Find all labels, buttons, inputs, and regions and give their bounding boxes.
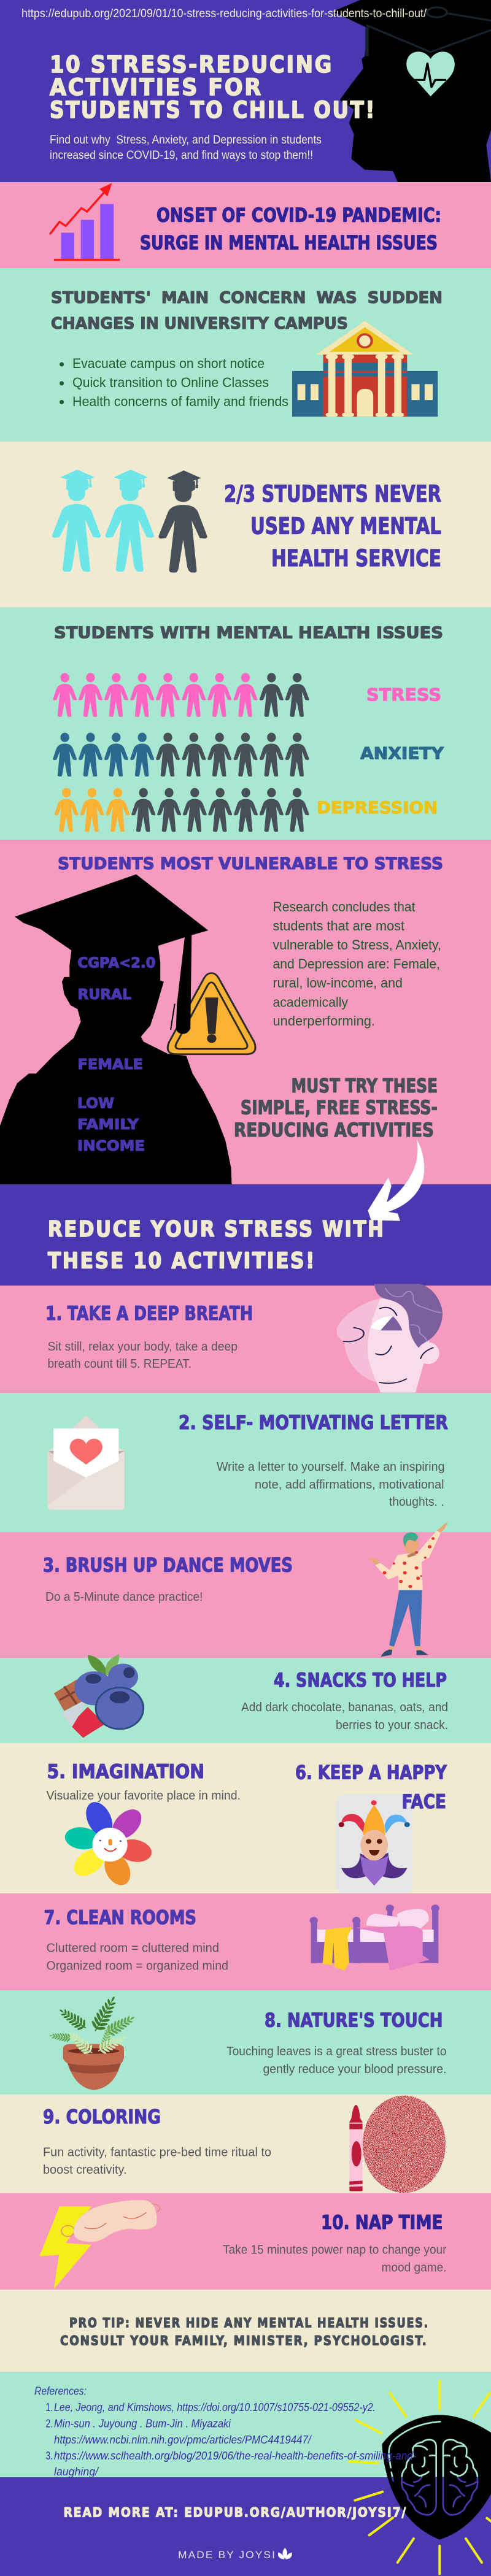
heading: imagination: 5. IMAGINATION [47,1761,204,1783]
risk labels: RURAL [77,987,131,1003]
description: Take 15 minutes power nap to change your [223,2244,447,2257]
panel: pro tip [0,2290,491,2372]
heading [140,205,441,254]
references: https://www.ncbi.nlm.nih.gov/pmc/articles/PMC4419447/ [54,2434,312,2446]
icon: messy bed [310,1904,439,1971]
research paragraph: vulnerable to Stress, Anxiety, [273,937,441,953]
icon: envelope with heart [48,1416,125,1510]
panel: activity 3 dance moves [0,1522,491,1658]
research paragraph: underperforming. [273,1013,375,1029]
description: breath count till 5. REPEAT. [48,1357,191,1371]
title: STUDENTS TO CHILL OUT! [50,97,376,123]
panel: references background [0,2372,491,2477]
risk labels: INCOME [77,1138,145,1154]
icon: brain shield with rays [349,2381,491,2574]
research paragraph: Research concludes that [273,899,415,914]
icon: student head silhouette with mental health heart [333,0,491,182]
heading: REDUCE YOUR STRESS WITH [48,1217,385,1242]
label: depression: DEPRESSION [317,799,438,818]
panel: activity 7 clean rooms [0,1893,491,1991]
icon: jester face [336,1795,412,1893]
description: Organized room = organized mind [47,1959,228,1972]
bullet list: Evacuate campus on short notice [72,356,265,371]
icon: university building [292,321,438,416]
pictogram: depression row [55,788,309,832]
references: 1. [45,2401,53,2413]
description: Fun activity, fantastic pre-bed time ritual to [43,2145,271,2159]
panel: activity 8 nature's touch [0,1990,491,2095]
source url: https://edupub.org/2021/09/01/10-stress-reducing-activities-for-students-to-chill-out/ [21,7,427,20]
heading: STUDENTS WITH MENTAL HEALTH ISSUES [54,624,443,643]
bullet list: Quick transition to Online Classes [72,375,269,390]
heading [48,1217,385,1273]
heading: 4. SNACKS TO HELP [274,1669,447,1692]
title: 10 STRESS-REDUCING [50,52,333,78]
heading: STUDENTS' MAIN CONCERN WAS SUDDEN [51,289,443,307]
research paragraph [273,899,441,1029]
icon: rising bar chart with arrow [50,183,120,261]
risk labels: FAMILY [77,1117,139,1133]
description [48,1340,238,1371]
heading: 2. SELF- MOTIVATING LETTER [179,1412,448,1434]
icon: lotus logo [278,2548,292,2559]
heading: THESE 10 ACTIVITIES! [48,1249,316,1273]
panel: main concern [0,268,491,442]
icon: three graduates [52,470,207,572]
pictogram: anxiety row [53,733,309,776]
label: stress: STRESS [366,684,441,705]
panel: activity 1 deep breath [0,1284,491,1393]
description [241,1701,448,1732]
panel: activity 4 snacks [0,1654,491,1743]
description: Do a 5-Minute dance practice! [45,1590,203,1604]
references: Lee, Jeong, and Kimshows, https://doi.org/10.1007/s10755-021-09552-y2. [54,2401,376,2413]
heading [51,289,443,333]
panel: 2/3 students [0,442,491,607]
research paragraph: students that are most [273,918,404,933]
description [43,2145,271,2177]
credit: MADE BY JOYSI [178,2549,276,2561]
description [226,2045,447,2076]
heading: 8. NATURE'S TOUCH [265,2009,443,2031]
research paragraph: academically [273,995,348,1010]
pictogram: stress row [53,673,309,717]
heading: happy face: FACE [401,1791,446,1813]
icon: graduate silhouette with warning sign [0,874,255,1184]
references: References: [34,2385,87,2397]
icon: smiling flower [63,1799,155,1888]
description: Sit still, relax your body, take a deep [48,1340,238,1354]
description: Add dark chocolate, bananas, oats, and [241,1701,448,1714]
heading: 3. BRUSH UP DANCE MOVES [43,1554,293,1576]
references: 3. [45,2450,53,2462]
bullet list [60,356,288,409]
panel: reduce your stress banner [0,1184,491,1286]
icon: crayon and red scribble [349,2096,446,2193]
panel: activity 10 nap time [0,2193,491,2290]
call to action [234,1075,438,1141]
icon: relaxed face [337,1284,443,1393]
tip text: PRO TIP: NEVER HIDE ANY MENTAL HEALTH ISSUES. [69,2316,429,2331]
description: Write a letter to yourself. Make an inspiring [217,1460,444,1474]
heading: 1. TAKE A DEEP BREATH [45,1303,253,1325]
panel: onset of pandemic [0,182,491,269]
description: imagination: Visualize your favorite place in mind. [47,1789,241,1803]
panel: activity 2 self-motivating letter [0,1393,491,1532]
panel: footer background [0,2477,491,2576]
tip text: CONSULT YOUR FAMILY, MINISTER, PSYCHOLOGIST. [60,2333,427,2348]
risk labels: FEMALE [77,1057,143,1073]
subtitle: Find out why Stress, Anxiety, and Depression in students [50,134,322,147]
description: berries to your snack. [336,1719,448,1732]
panel: activities 5 and 6 [0,1743,491,1893]
icon: potted fern [49,1993,137,2090]
call to action: REDUCING ACTIVITIES [234,1119,434,1141]
description: gently reduce your blood pressure. [263,2063,447,2076]
statistic text [224,481,441,572]
heading: happy face: 6. KEEP A HAPPY [295,1761,447,1784]
tip text [60,2316,429,2348]
label: anxiety: ANXIETY [360,745,444,763]
description [217,1460,444,1509]
description: thoughts. . [389,1495,444,1509]
icon: lightning bolt and sleep mask [39,2200,160,2289]
panel: students with mental health issues [0,607,491,840]
risk labels [77,956,156,1154]
references [34,2385,416,2478]
heading: 9. COLORING [43,2106,161,2128]
references: 2. [45,2418,53,2430]
description [47,1942,228,1972]
title: ACTIVITIES FOR [50,74,263,101]
heading: STUDENTS MOST VULNERABLE TO STRESS [58,854,443,873]
panel: students most vulnerable [0,840,491,1184]
statistic text: USED ANY MENTAL [250,513,441,540]
title [50,52,376,123]
call to action: MUST TRY THESE [291,1075,438,1097]
heading: ONSET OF COVID-19 PANDEMIC: [157,205,441,227]
references: Min-sun . Juyoung . Bum-Jin . Miyazaki [54,2418,231,2430]
heading: 7. CLEAN ROOMS [44,1907,196,1929]
description: boost creativity. [43,2163,126,2177]
subtitle [50,134,322,162]
bullet list: Health concerns of family and friends [72,394,288,409]
read more link: READ MORE AT: EDUPUB.ORG/AUTHOR/JOYSI7/ [64,2505,407,2520]
description: Touching leaves is a great stress buster to [226,2045,447,2058]
references: laughing/ [54,2466,99,2478]
icon: berries and chocolate [54,1654,144,1738]
references: https://www.sclhealth.org/blog/2019/06/the-real-health-benefits-of-smiling-and- [54,2450,416,2462]
risk labels: LOW [77,1095,114,1111]
description [223,2244,447,2274]
description: mood game. [382,2261,447,2274]
heading: CHANGES IN UNIVERSITY CAMPUS [51,315,348,333]
call to action: SIMPLE, FREE STRESS- [241,1097,438,1119]
statistic text: HEALTH SERVICE [271,545,441,572]
icon: dancing person [368,1522,448,1657]
risk labels: CGPA<2.0 [77,956,156,972]
subtitle: increased since COVID-19, and find ways to stop them!! [50,149,313,162]
research paragraph: and Depression are: Female, [273,956,440,972]
panel: header [0,0,491,182]
heading: happy face [295,1761,447,1813]
arrow: curved white arrow [368,1140,424,1221]
description: note, add affirmations, motivational [255,1478,444,1492]
research paragraph: rural, low-income, and [273,975,403,991]
panel: activity 9 coloring [0,2095,491,2193]
description: Cluttered room = cluttered mind [47,1942,219,1955]
heading: 10. NAP TIME [321,2212,443,2234]
